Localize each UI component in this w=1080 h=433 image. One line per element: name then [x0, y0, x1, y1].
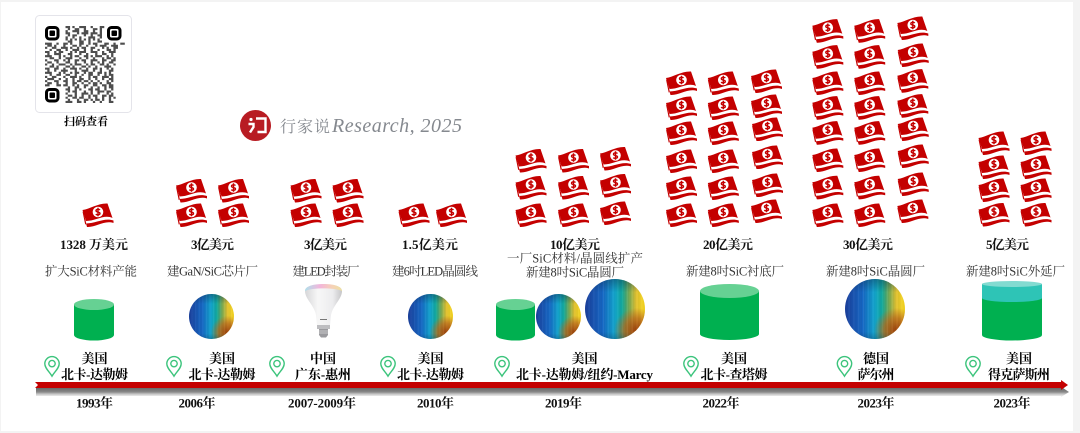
location labels: 美国 [209, 351, 235, 366]
year labels: 2010年 [417, 396, 454, 410]
year labels: 2023年 [994, 396, 1030, 410]
investment amounts: 3亿美元 [191, 237, 234, 252]
location labels: 北卡-达勒姆 [397, 367, 464, 382]
money icons: 2023 Texas [978, 131, 1052, 227]
money icons: 2023 Germany [812, 16, 929, 227]
location labels: 中国 [310, 351, 336, 366]
location labels: 美国 [1006, 351, 1032, 366]
project descriptions [45, 250, 1065, 280]
brand logo and watermark: 行家说 [280, 118, 330, 136]
investment amounts [60, 237, 1029, 252]
location labels: 萨尔州 [858, 367, 894, 382]
location labels: 得克萨斯州 [988, 367, 1050, 382]
investment amounts: 3亿美元 [304, 237, 347, 252]
location labels: 北卡-达勒姆/纽约-Marcy [516, 367, 654, 382]
wafer: 2019 large [585, 279, 645, 339]
money icons: 2007-2009 [290, 179, 364, 227]
project descriptions: 建GaN/SiC芯片厂 [167, 264, 258, 278]
year labels: 2019年 [545, 396, 582, 410]
location pins [45, 357, 980, 376]
location labels: 美国 [571, 351, 598, 366]
cylinder: 1993 [74, 299, 114, 340]
project descriptions: 建LED封装厂 [292, 264, 360, 278]
project descriptions: 新建8吋SiC晶圆厂 [526, 264, 624, 280]
year labels: 2023年 [858, 396, 894, 410]
location labels: 北卡-查塔姆 [700, 367, 768, 382]
investment amounts: 30亿美元 [843, 237, 893, 252]
project descriptions: 新建8吋SiC晶圆厂 [826, 264, 925, 278]
money icons: 2006 [176, 179, 249, 227]
project descriptions: 扩大SiC材料产能 [45, 264, 137, 278]
project descriptions: 一厂SiC材料/晶圆线扩产 [507, 250, 643, 266]
year labels [76, 396, 1030, 410]
location labels: 北卡-达勒姆 [188, 367, 256, 382]
wafer: 2019 small [536, 294, 581, 339]
location labels: 德国 [863, 351, 889, 366]
wafer: 2010 [408, 294, 453, 339]
money icons: 2022 [666, 69, 783, 227]
wafer: 2023 Germany [845, 279, 905, 339]
QR code card [36, 16, 132, 112]
location labels [61, 351, 1050, 382]
QR caption: 扫码查看 [64, 114, 108, 128]
year labels: 2007-2009年 [288, 396, 356, 410]
investment amounts: 1328 万美元 [60, 237, 128, 252]
location labels: 广东-惠州 [295, 367, 351, 382]
project descriptions: 新建8吋SiC衬底厂 [686, 264, 784, 278]
timeline arrow [35, 380, 1069, 397]
money icons: 2019 [516, 147, 631, 227]
location labels: 美国 [417, 351, 444, 366]
investment amounts: 5亿美元 [986, 237, 1029, 252]
cylinder: 2023 Texas with epitaxial layer [982, 281, 1042, 340]
year labels: 2022年 [702, 396, 740, 410]
year labels: 1993年 [76, 396, 113, 410]
brand logo and watermark: Research, 2025 [331, 115, 462, 137]
location labels: 美国 [81, 351, 108, 366]
investment amounts: 1.5亿美元 [402, 237, 458, 252]
cylinder: 2019 [496, 299, 535, 340]
LED bulb [305, 284, 342, 338]
project descriptions: 建6吋LED晶圆线 [392, 264, 478, 278]
location labels: 美国 [721, 351, 747, 366]
cylinder: 2022 [700, 284, 759, 340]
location labels: 北卡-达勒姆 [61, 367, 128, 382]
money icons: 2010 [398, 203, 467, 227]
investment amounts: 20亿美元 [703, 237, 753, 252]
investment amounts: 10亿美元 [550, 237, 600, 252]
wafer: 2006 [189, 294, 234, 339]
brand logo and watermark [240, 110, 462, 141]
money icons: 1993 [82, 203, 114, 227]
project descriptions: 新建8吋SiC外延厂 [966, 264, 1065, 278]
year labels: 2006年 [178, 396, 216, 410]
